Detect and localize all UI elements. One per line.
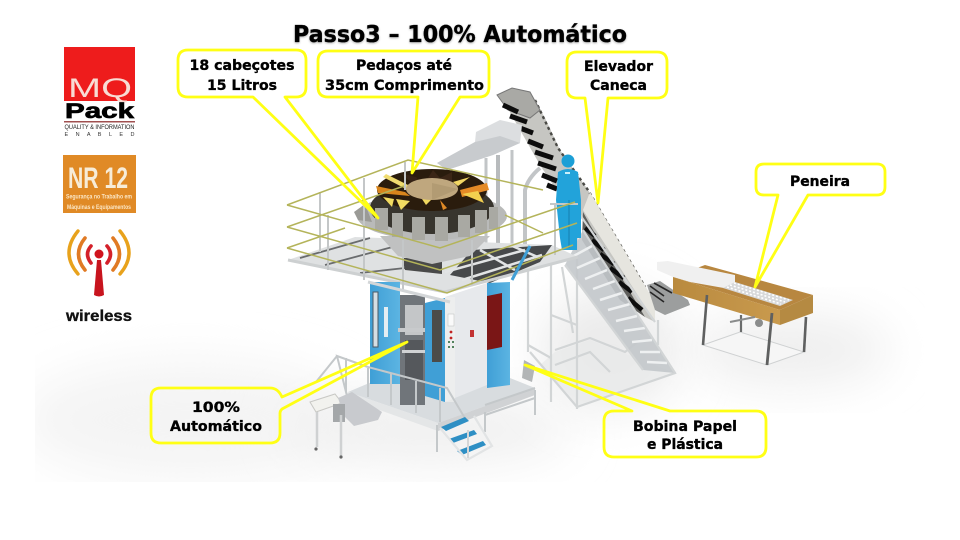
callout: Peneira [755, 164, 885, 287]
callout: Elevador Caneca [567, 52, 667, 203]
sieve table [647, 261, 813, 365]
logo: NR 12: NR 12 [68, 162, 128, 195]
bucket elevator [497, 88, 655, 322]
logo: NR 12 [63, 155, 136, 213]
machine illustration [287, 88, 813, 460]
icon: wireless [65, 231, 132, 325]
packaging machine body [368, 246, 535, 405]
elevator frame base [528, 212, 675, 409]
callout: 100% Automático: Automático [170, 419, 262, 435]
logo: MQ Pack: Pack [65, 100, 134, 123]
upper platform deck [288, 237, 578, 292]
guardrails [287, 160, 578, 293]
lower platform floor [346, 370, 535, 452]
logo: MQ Pack: MQ [68, 73, 132, 103]
lower platform railing [316, 356, 466, 422]
callout: Pedaços até 35cm Comprimento: 35cm Comprimento [325, 78, 484, 94]
logo: MQ Pack: QUALITY & INFORMATION [64, 125, 134, 131]
callout: 100% Automático [151, 342, 407, 443]
callout: 100% Automático: 100% [192, 400, 241, 416]
background floor shading [51, 294, 872, 464]
callout: 18 cabeçotes 15 Litros [178, 50, 378, 218]
blue access steps [440, 416, 492, 460]
callout: Bobina Papel e Plástica: e Plástica [647, 437, 723, 453]
logo: MQ Pack: E N A B L E D [64, 132, 135, 138]
callout: 18 cabeçotes 15 Litros: 15 Litros [207, 78, 277, 94]
access stairs [565, 212, 675, 373]
icon: wireless: wireless [65, 308, 132, 325]
title: Passo3 – 100% Automático [293, 23, 627, 49]
callout: Bobina Papel e Plástica [525, 365, 766, 457]
callout: Peneira: Peneira [790, 174, 850, 190]
multihead weigher [354, 169, 507, 274]
logo: NR 12: Segurança no Trabalho em [66, 194, 132, 200]
person scale figure [556, 154, 581, 250]
upper chute [437, 120, 540, 270]
callout: Bobina Papel e Plástica: Bobina Papel [633, 419, 737, 435]
logo: NR 12: Máquinas e Equipamentos [67, 204, 131, 211]
callout: Pedaços até 35cm Comprimento [318, 51, 489, 173]
callout: 18 cabeçotes 15 Litros: 18 cabeçotes [190, 58, 294, 74]
title: Passo3 – 100% Automático [293, 22, 627, 48]
small outfeed conveyor [310, 392, 382, 459]
callout: Elevador Caneca: Elevador [584, 59, 654, 75]
callout: Pedaços até 35cm Comprimento: Pedaços até [356, 58, 452, 74]
callout: Elevador Caneca: Caneca [590, 78, 647, 94]
logo: MQ Pack [64, 47, 135, 138]
